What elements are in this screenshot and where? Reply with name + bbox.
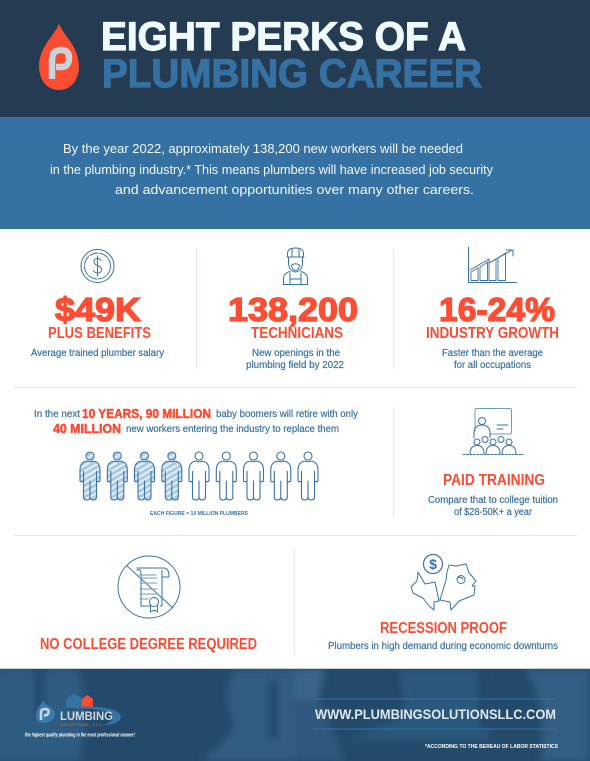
footer <box>0 668 590 761</box>
no college degree <box>40 556 257 653</box>
intro panel: and advancement opportunities over many other careers. <box>115 182 474 197</box>
text: retirement gap: 40 MILLION <box>53 421 121 436</box>
recession proof: Plumbers in high demand during economic downturns <box>328 641 558 652</box>
icon: plumber worker <box>283 248 308 284</box>
stat: industry growth: INDUSTRY GROWTH <box>426 325 559 342</box>
pictogram: nine figures <box>80 452 318 500</box>
icon: dollar coin <box>81 250 114 282</box>
footer logo: the highest quality plumbing in the most professional manner! <box>25 732 135 738</box>
no college degree: NO COLLEGE DEGREE REQUIRED <box>40 636 257 653</box>
stat: salary: $49K <box>55 291 141 328</box>
text: retirement gap: baby boomers will retire with only <box>216 409 358 420</box>
paid training: PAID TRAINING <box>443 472 545 489</box>
caption: EACH FIGURE = 10 MILLION PLUMBERS <box>150 511 249 517</box>
intro panel <box>0 117 590 229</box>
stat: industry growth: for all occupations <box>454 360 531 371</box>
stat: salary: Average trained plumber salary <box>31 348 164 359</box>
paid training: Compare that to college tuition <box>428 495 558 506</box>
footnote: *ACCORDING TO THE BEREAU OF LABOR STATISTICS <box>425 744 558 750</box>
stat: industry growth: Faster than the average <box>442 348 543 359</box>
website url: WWW.PLUMBINGSOLUTIONSLLC.COM <box>315 706 556 722</box>
footer logo: SOLUTIONS, LLC <box>60 723 102 727</box>
text: retirement gap: In the next <box>34 409 80 420</box>
stat: technicians: 138,200 <box>228 291 358 328</box>
stat: salary <box>31 250 164 359</box>
recession proof: RECESSION PROOF <box>380 620 507 637</box>
stat: industry growth: 16-24% <box>439 291 555 328</box>
footer logo <box>25 693 135 738</box>
icon: broken piggy bank and coin: $ <box>429 556 437 572</box>
intro panel: in the plumbing industry.* This means plumbers will have increased job security <box>50 162 493 177</box>
text: retirement gap: new workers entering the industry to replace them <box>126 424 339 435</box>
baby boomers statistic <box>34 406 358 517</box>
icon: growth chart <box>468 247 516 282</box>
recession proof <box>328 554 558 652</box>
stat: industry growth <box>426 247 559 371</box>
stat: technicians <box>228 248 358 371</box>
footer logo: LUMBING <box>60 711 113 723</box>
text: retirement gap <box>34 406 358 436</box>
stat: technicians: New openings in the <box>252 348 340 359</box>
icon: houses <box>66 693 93 707</box>
icon: crossed-out diploma <box>118 556 180 618</box>
header band <box>0 0 590 117</box>
paid training <box>428 408 558 518</box>
icon: classroom <box>463 408 523 454</box>
icon: broken piggy bank and coin <box>411 554 476 610</box>
stat: salary: PLUS BENEFITS <box>48 325 151 342</box>
title: EIGHT PERKS OF A <box>101 15 466 59</box>
text: retirement gap: 10 YEARS, 90 MILLION <box>82 406 211 421</box>
icon: plumbing drop logo <box>39 23 79 90</box>
intro panel: By the year 2022, approximately 138,200 new workers will be needed <box>63 141 463 156</box>
title <box>101 15 482 96</box>
stat: technicians: plumbing field by 2022 <box>246 360 344 371</box>
title: PLUMBING CAREER <box>102 52 482 96</box>
footer photo background: faucet <box>0 669 590 761</box>
paid training: of $28-50K+ a year <box>454 507 533 518</box>
stat: technicians: TECHNICIANS <box>251 325 343 342</box>
